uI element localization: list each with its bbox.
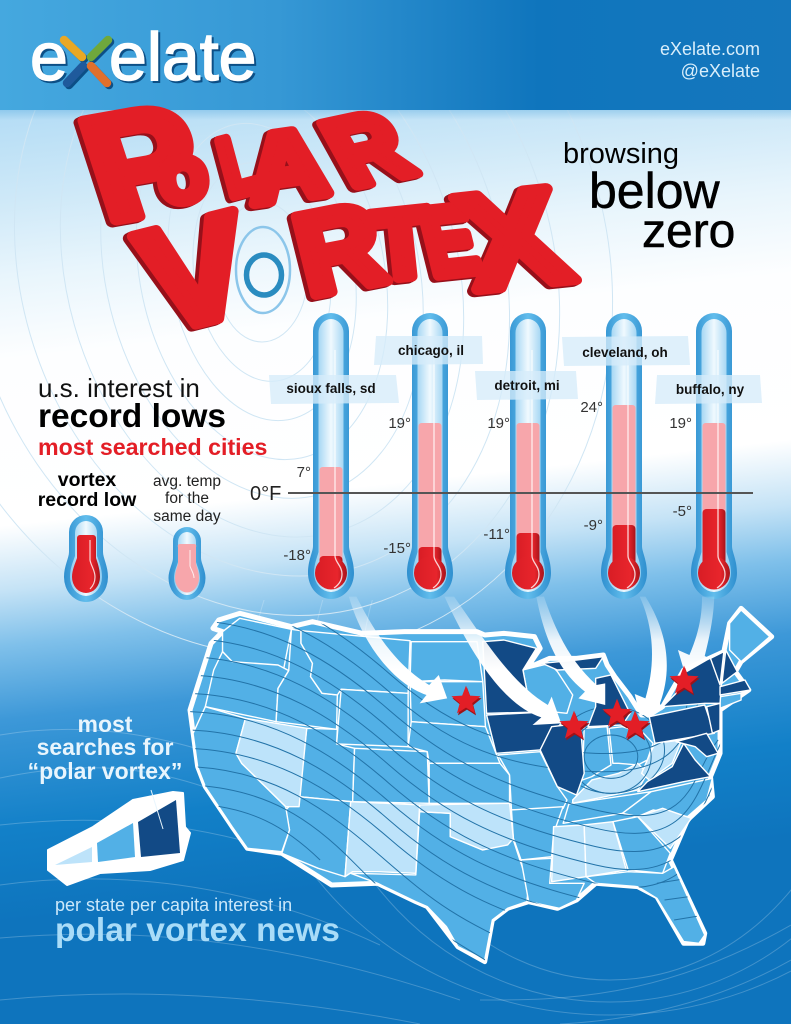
temperature values <box>283 399 692 564</box>
legend: average temperature: same day <box>153 508 221 525</box>
temperature values: -9° <box>584 517 603 534</box>
low interest states <box>236 718 691 882</box>
map contour lines <box>190 622 720 960</box>
legend: average temperature <box>153 473 221 600</box>
arrow: cleveland <box>635 597 667 715</box>
subtitle: browsing below zero: zero <box>642 205 735 258</box>
arrow: chicago <box>444 597 561 725</box>
vortex contour lines, upper <box>0 0 720 756</box>
city labels <box>269 336 762 404</box>
label: sioux falls <box>269 375 399 404</box>
header links: eXelate.com <box>660 39 760 59</box>
temperature values: 19° <box>388 415 411 432</box>
label: detroit: detroit, mi <box>494 378 560 393</box>
heading: record lows: most searched cities <box>38 434 267 460</box>
subtitle: browsing below zero: below <box>589 163 721 219</box>
map white edge <box>190 608 772 962</box>
map key heading: searches for <box>37 734 173 760</box>
temperature values: 19° <box>487 415 510 432</box>
label: chicago <box>374 336 483 365</box>
star: detroit <box>602 699 632 726</box>
header links: @eXelate <box>681 61 760 81</box>
heading: record lows <box>38 373 267 460</box>
title: Polar Vortex: R <box>283 178 396 320</box>
temperature values: -15° <box>383 540 411 557</box>
thermometer: chicago <box>407 313 453 599</box>
star: sioux falls <box>451 686 481 713</box>
label: detroit <box>475 371 578 400</box>
temperature values: -18° <box>283 547 311 564</box>
temperature values: 19° <box>669 415 692 432</box>
star: chicago <box>559 711 589 738</box>
thermometer: buffalo <box>691 313 737 599</box>
temperature values: 24° <box>580 399 603 416</box>
title: Polar Vortex: V <box>124 181 266 365</box>
vortex rings <box>236 227 290 313</box>
map key heading <box>28 711 182 784</box>
title: Polar Vortex <box>63 73 585 365</box>
arrow: sioux falls <box>349 597 447 703</box>
logo: eXelate <box>30 19 256 95</box>
label: cleveland <box>562 336 690 366</box>
title: Polar Vortex: A <box>240 107 334 224</box>
thermometer: cleveland <box>601 313 647 599</box>
title: Polar Vortex: P <box>63 73 223 253</box>
medium interest states <box>193 610 770 960</box>
label: buffalo: buffalo, ny <box>676 382 745 397</box>
zero degree line: 0°F <box>250 483 281 505</box>
title: Polar Vortex: R <box>305 92 430 207</box>
high interest states <box>483 640 751 795</box>
legend: vortex record low: record low <box>38 489 137 511</box>
logo: eXelate: elate <box>109 19 256 95</box>
star: cleveland <box>620 711 650 738</box>
lower contour lines <box>0 600 791 1024</box>
icon: pink thermometer <box>168 527 206 600</box>
arrows to cities <box>349 597 714 725</box>
title: Polar Vortex: L <box>210 116 270 214</box>
title: Polar Vortex: X <box>441 159 585 318</box>
label: sioux falls: sioux falls, sd <box>286 381 376 396</box>
map caption: polar vortex news <box>55 912 340 949</box>
map key: shade scale <box>48 790 190 885</box>
legend: average temperature: avg. temp <box>153 473 221 490</box>
legend: vortex record low <box>38 469 137 602</box>
thermometer: sioux falls <box>308 313 354 599</box>
icon: red thermometer <box>64 515 108 602</box>
arrow: buffalo <box>678 597 714 669</box>
heading: record lows: u.s. interest in <box>38 373 200 403</box>
heading: record lows: record lows <box>38 398 226 435</box>
map: united states <box>190 583 772 967</box>
city stars <box>451 666 699 738</box>
label: buffalo <box>655 375 762 404</box>
label: cleveland: cleveland, oh <box>582 345 668 360</box>
arrow: detroit <box>536 597 605 705</box>
header links <box>660 39 760 81</box>
temperature values: -5° <box>673 503 692 520</box>
thermometer: detroit <box>505 313 551 599</box>
logo: eXelate: e <box>30 19 68 95</box>
legend: average temperature: for the <box>165 490 209 507</box>
temperature values: -11° <box>483 526 510 543</box>
title: Polar Vortex: E <box>411 186 488 296</box>
map key heading: most <box>78 711 133 737</box>
title: Polar Vortex: T <box>367 188 437 301</box>
subtitle: browsing below zero <box>563 138 735 258</box>
star: buffalo <box>669 666 699 693</box>
temperature values: 7° <box>297 464 311 481</box>
header band <box>0 0 791 120</box>
title: Polar Vortex: O <box>155 144 211 217</box>
map key heading: “polar vortex” <box>28 758 182 784</box>
map caption <box>55 895 340 949</box>
subtitle: browsing below zero: browsing <box>563 138 679 170</box>
icon: logo X <box>64 40 108 83</box>
map caption: per state per capita interest in <box>55 895 292 915</box>
label: chicago: chicago, il <box>398 343 464 358</box>
legend: vortex record low: vortex <box>58 469 116 491</box>
